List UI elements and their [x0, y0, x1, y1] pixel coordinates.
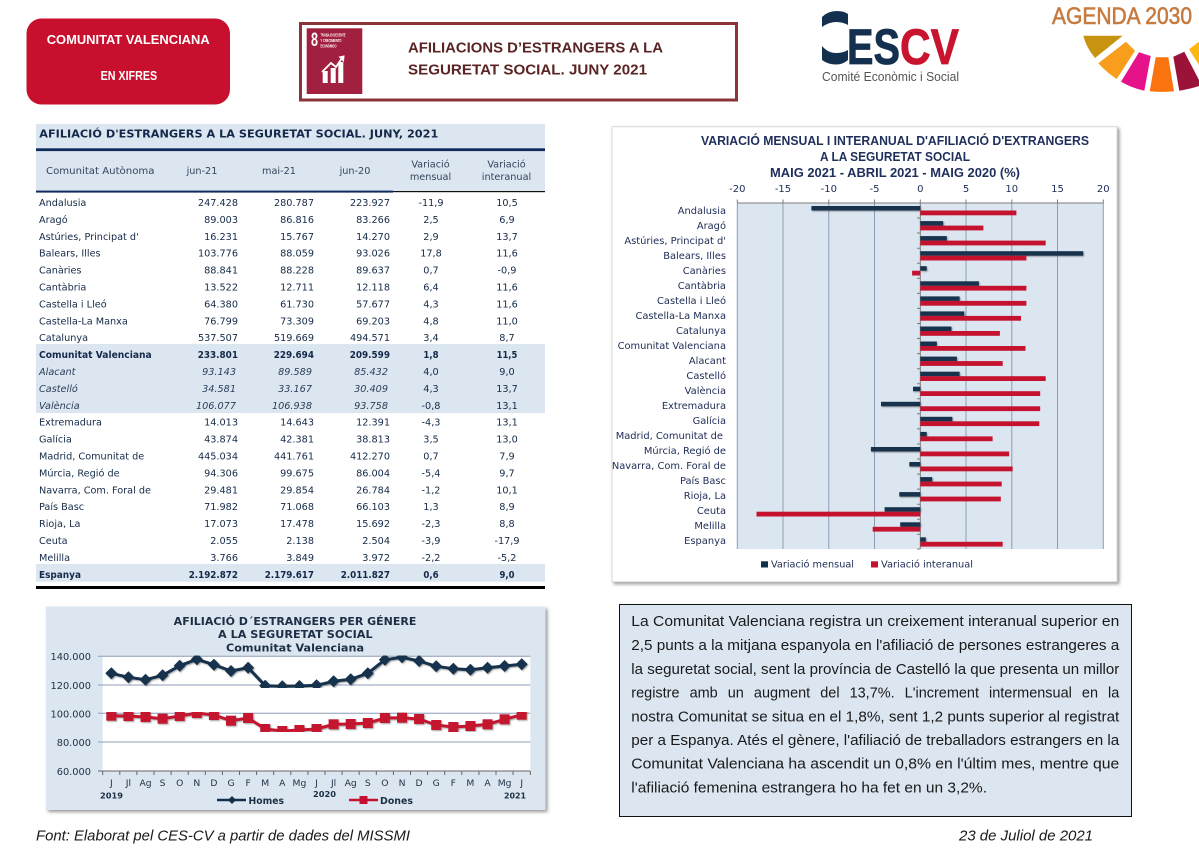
category labels: País Basc — [680, 475, 726, 487]
row: Ceuta: 2.138 — [286, 536, 314, 547]
row: Astúries: 2,9 — [423, 232, 439, 243]
month labels: Jl — [330, 778, 336, 789]
row: Aragó: 86.816 — [280, 215, 314, 226]
month labels: S — [365, 778, 371, 789]
row: Madrid: Madrid, Comunitat de — [39, 452, 144, 462]
row: Castelló: 30.409 — [354, 384, 388, 395]
row: Castella-La Manxa — [39, 316, 518, 327]
category labels: Espanya — [684, 536, 726, 547]
title box — [300, 24, 736, 100]
row: Navarra — [39, 485, 518, 496]
row: Aragó — [39, 214, 515, 226]
row: València: València — [39, 400, 80, 412]
row: Comunitat Valenciana: Comunitat Valenciana — [39, 350, 152, 361]
table header: interanual — [482, 172, 531, 183]
row: Castelló: 4,3 — [423, 384, 439, 395]
row: Espanya total: Espanya — [39, 570, 81, 581]
row: Canàries — [39, 265, 516, 277]
top axis labels: -15 — [775, 184, 791, 195]
category labels: Cantàbria — [678, 280, 726, 292]
chart title: A LA SEGURETAT SOCIAL — [820, 150, 970, 164]
row: Rioja — [39, 519, 515, 530]
month labels: O — [381, 778, 389, 789]
row: Castella-La Manxa: 73.309 — [280, 316, 314, 327]
month labels: Ag — [345, 778, 357, 789]
row: Madrid: 441.761 — [274, 452, 314, 462]
row: Galícia: 43.874 — [204, 435, 238, 446]
row: Ceuta: -3,9 — [422, 536, 440, 547]
row: Castella i Lleó: 64.380 — [204, 299, 238, 310]
line: Homes — [111, 657, 522, 686]
month labels: A — [279, 778, 286, 789]
table title: AFILIACIÓ D'ESTRANGERS A LA SEGURETAT SOCIAL. JUNY, 2021 — [39, 127, 438, 140]
line chart legend — [217, 796, 413, 807]
line chart title — [174, 615, 416, 655]
row: Catalunya — [39, 333, 515, 344]
line: Dones — [111, 713, 522, 731]
line chart legend: Dones — [380, 796, 413, 807]
row: Melilla: 3.766 — [210, 553, 238, 564]
row: Extremadura: 13,1 — [496, 418, 518, 429]
row: Madrid — [39, 452, 515, 462]
row: Múrcia — [39, 467, 515, 479]
y axis labels: 100.000 — [50, 710, 91, 720]
table header: jun-21 — [186, 166, 217, 177]
badge: Comunitat Valenciana en xifres: COMUNITAT VALENCIANA — [47, 32, 210, 47]
text block: summary — [620, 604, 1132, 816]
category labels: Melilla — [694, 521, 726, 532]
row: Castella-La Manxa: 69.203 — [356, 316, 390, 327]
row: Extremadura: -4,3 — [422, 418, 440, 429]
row: Cantàbria: 12.118 — [356, 282, 390, 294]
row: País Basc: 71.982 — [204, 502, 238, 513]
row: Balears: 88.059 — [280, 249, 314, 260]
row: Aragó: 83.266 — [356, 215, 390, 226]
row: País Basc: 8,9 — [499, 502, 515, 513]
row: Canàries: Canàries — [39, 265, 81, 277]
table header: Variació — [487, 158, 526, 170]
table header: mensual — [410, 172, 451, 183]
row: Navarra: -1,2 — [422, 485, 440, 496]
logo: Agenda 2030 — [1052, 3, 1199, 92]
row: Andalusia — [39, 198, 518, 209]
category labels: Galícia — [693, 415, 726, 427]
row: Castelló — [39, 383, 518, 395]
row: Rioja: -2,3 — [422, 519, 440, 530]
row: Cantàbria: 12.711 — [280, 282, 314, 294]
badge: Comunitat Valenciana en xifres: EN XIFRES — [101, 68, 157, 83]
row: Galícia — [39, 434, 518, 446]
row: Ceuta: 2.504 — [362, 536, 390, 547]
y axis labels: 60.000 — [57, 767, 91, 778]
category labels: Comunitat Valenciana — [618, 341, 726, 352]
row: Galícia: 42.381 — [280, 435, 314, 446]
month labels: F — [451, 778, 456, 789]
row: Andalusia: 280.787 — [274, 198, 314, 209]
row: Ceuta: 2.055 — [210, 536, 238, 547]
row: Extremadura: 12.391 — [356, 418, 390, 429]
row: Melilla: 3.972 — [362, 553, 390, 564]
month labels: G — [227, 778, 235, 789]
row: València: 93.758 — [354, 401, 388, 412]
row: Cantàbria: Cantàbria — [39, 282, 86, 294]
logo: CES CV: ES — [847, 19, 900, 75]
top axis labels: 20 — [1097, 184, 1110, 195]
row: Rioja: 17.073 — [204, 519, 238, 530]
icon: SDG 8 decent work: Y CRECIMIENTO — [320, 38, 342, 43]
row: Aragó: 6,9 — [499, 215, 515, 226]
legend: Variació interanual — [881, 558, 973, 570]
icon: SDG 8 decent work: TRABAJO DECENTE — [320, 32, 346, 38]
month labels: J — [314, 778, 318, 789]
logo: CES CV: CV — [900, 19, 960, 75]
row: País Basc: 1,3 — [423, 502, 439, 513]
row: Aragó: Aragó — [39, 214, 68, 226]
y axis labels: 140.000 — [50, 652, 91, 663]
row: Canàries: 0,7 — [423, 266, 439, 277]
text block: summary: 2,5 punts a la mitjana espanyola en l'afiliació de persones estrangeres a — [631, 638, 1119, 654]
row: Castella-La Manxa: 4,8 — [423, 316, 439, 327]
row: Alacant: 93.143 — [202, 367, 236, 378]
row: Galícia: 3,5 — [423, 435, 439, 446]
row: València — [39, 400, 518, 412]
chart title: MAIG 2021 - ABRIL 2021 - MAIG 2020 (%) — [770, 166, 1020, 180]
text block: summary: l'afiliació femenina estrangera ho ha fet en un 3,2%. — [631, 780, 987, 796]
row: Castelló: 13,7 — [496, 384, 518, 395]
month labels: A — [484, 778, 491, 789]
row: Castella i Lleó: Castella i Lleó — [39, 298, 107, 310]
badge: Comunitat Valenciana en xifres — [26, 18, 230, 104]
chart title: VARIACIÓ MENSUAL I INTERANUAL D'AFILIACIÓ D'EXTRANGERS — [701, 133, 1089, 148]
row: Canàries: -0,9 — [498, 266, 516, 277]
category labels: Rioja, La — [684, 491, 726, 502]
row: Melilla: -5,2 — [498, 553, 516, 564]
row: Melilla: Melilla — [39, 553, 70, 564]
bars: monthly variation — [811, 206, 1083, 542]
row: Madrid: 0,7 — [423, 452, 439, 462]
row: Extremadura — [39, 418, 518, 429]
row: Espanya total — [36, 564, 545, 582]
row: Canàries: 89.637 — [356, 266, 390, 277]
top axis labels: 15 — [1051, 184, 1064, 195]
row: Alacant — [38, 367, 515, 378]
row: Astúries: 16.231 — [204, 232, 238, 243]
row: País Basc: 71.068 — [280, 502, 314, 513]
icon: SDG 8 decent work: 8 — [311, 30, 318, 51]
row: Balears: 11,6 — [496, 249, 518, 260]
line chart legend: Homes — [248, 796, 284, 807]
row: Madrid: 445.034 — [198, 452, 238, 462]
row: País Basc: 66.103 — [356, 502, 390, 513]
row: Alacant: 4,0 — [423, 367, 439, 378]
highlighted block: Comunitat Valenciana — [36, 344, 545, 413]
icon: SDG 8 decent work — [307, 28, 362, 94]
row: Andalusia: -11,9 — [418, 198, 444, 209]
row: Cantàbria: 6,4 — [423, 282, 439, 294]
row: Espanya total: 2.011.827 — [341, 570, 390, 581]
plot background and grid — [737, 200, 1103, 549]
row: Cantàbria: 11,6 — [496, 282, 518, 294]
text block: summary: Comunitat Valenciana ha ascendit un 0,8% en l'últim mes, mentre que — [631, 757, 1119, 773]
category labels: Alacant — [689, 356, 726, 367]
category labels: Madrid, Comunitat de — [616, 431, 723, 442]
month labels: N — [193, 778, 200, 789]
row: Alacant: Alacant — [38, 367, 77, 378]
row: Rioja: 8,8 — [499, 519, 515, 530]
chart title — [701, 133, 1089, 180]
row: València: 106.077 — [196, 401, 237, 412]
title box: AFILIACIONS D’ESTRANGERS A LA — [408, 41, 664, 57]
row: València: -0,8 — [422, 401, 440, 412]
row: Comunitat Valenciana: 209.599 — [350, 350, 390, 361]
month labels: D — [416, 778, 423, 789]
logo: CES CV: Comité Econòmic i Social — [822, 70, 959, 84]
title box: SEGURETAT SOCIAL. JUNY 2021 — [408, 63, 647, 79]
table header: Comunitat Autònoma — [46, 165, 155, 177]
source note: Font: Elaborat pel CES-CV a partir de dades del MISSMI — [36, 828, 410, 844]
y axis labels: 80.000 — [57, 738, 91, 749]
top axis labels — [729, 184, 1110, 195]
row: Ceuta: Ceuta — [39, 536, 68, 547]
category labels: Canàries — [683, 265, 726, 277]
category labels: Múrcia, Regió de — [644, 445, 726, 457]
row: Extremadura: 14.643 — [280, 418, 314, 429]
row: Castella i Lleó: 57.677 — [356, 299, 390, 310]
row: Balears — [39, 249, 518, 260]
row: Castella i Lleó: 61.730 — [280, 299, 314, 310]
category labels: Balears, Illes — [663, 251, 726, 262]
row: Navarra: 29.854 — [280, 485, 314, 496]
logo: CES CV — [822, 11, 960, 84]
row: Espanya total: 2.192.872 — [189, 570, 238, 581]
month labels: J — [109, 778, 113, 789]
row: Alacant: 89.589 — [278, 367, 312, 378]
table header: Variació — [411, 158, 450, 170]
category labels: Catalunya — [676, 326, 726, 337]
date: 23 de Juliol de 2021 — [958, 828, 1093, 844]
row: País Basc — [39, 501, 515, 513]
row: Catalunya: 3,4 — [423, 333, 439, 344]
row: Rioja: 15.692 — [356, 519, 390, 530]
row: Aragó: 2,5 — [423, 215, 439, 226]
row: País Basc: País Basc — [39, 501, 84, 513]
year labels — [100, 790, 526, 800]
row: Comunitat Valenciana: 233.801 — [198, 350, 238, 361]
category labels: Castella-La Manxa — [635, 311, 726, 322]
month labels: Mg — [293, 778, 306, 789]
row: Extremadura: Extremadura — [39, 418, 102, 429]
category labels: Aragó — [697, 220, 726, 232]
row: Andalusia: 223.927 — [350, 198, 390, 209]
row: Rioja: 17.478 — [280, 519, 314, 530]
row: Balears: 17,8 — [420, 249, 442, 260]
top axis labels: -20 — [729, 184, 745, 195]
row: Astúries: 14.270 — [356, 232, 390, 243]
row: Múrcia: -5,4 — [422, 468, 440, 479]
text block: summary: la seguretat social, sent la província de Castelló la que presenta un millor — [631, 662, 1120, 678]
category labels: Astúries, Principat d' — [624, 235, 726, 247]
row: Extremadura: 14.013 — [204, 418, 238, 429]
icon: SDG 8 decent work: ECONÓMICO — [320, 44, 337, 48]
row: València: 13,1 — [496, 401, 518, 412]
row: Castella-La Manxa: 76.799 — [204, 316, 238, 327]
month labels: Jl — [125, 778, 131, 789]
month labels: M — [466, 778, 474, 789]
row: Galícia: 38.813 — [356, 435, 390, 446]
row: Espanya total: 2.179.617 — [265, 570, 314, 581]
row: Castella i Lleó — [39, 298, 518, 310]
row: Múrcia: 94.306 — [204, 468, 238, 479]
row: Andalusia: 10,5 — [496, 198, 518, 209]
row: Astúries: Astúries, Principat d' — [39, 231, 139, 243]
row: Múrcia: 99.675 — [280, 468, 314, 479]
row: Astúries: 13,7 — [496, 232, 518, 243]
row: Balears: 93.026 — [356, 249, 390, 260]
table: foreign affiliates by region — [36, 124, 545, 589]
y axis labels — [50, 652, 91, 778]
row: Comunitat Valenciana — [39, 350, 517, 361]
top axis labels: 5 — [963, 184, 969, 195]
row: Alacant: 9,0 — [499, 367, 515, 378]
month labels: F — [245, 778, 251, 789]
row: Navarra: Navarra, Com. Foral de — [39, 485, 151, 496]
line chart title: AFILIACIÓ D´ESTRANGERS PER GÉNERE — [174, 615, 416, 628]
row: Múrcia: 86.004 — [356, 468, 390, 479]
category labels: Castella i Lleó — [657, 295, 726, 307]
row: Castelló: Castelló — [39, 383, 78, 395]
legend — [761, 558, 973, 570]
row: Castella-La Manxa: 11,0 — [496, 316, 518, 327]
row: Comunitat Valenciana: 1,8 — [423, 350, 439, 361]
row: Catalunya: 8,7 — [499, 333, 515, 344]
row: Castelló: 34.581 — [202, 384, 236, 395]
row: Astúries: 15.767 — [280, 232, 314, 243]
row: Comunitat Valenciana: 229.694 — [274, 350, 314, 361]
panel: monthly and yearly variation bar chart — [612, 127, 1117, 582]
row: Catalunya: 494.571 — [350, 333, 390, 344]
month labels: G — [433, 778, 440, 789]
top axis labels: -5 — [870, 184, 879, 195]
row: Catalunya: 537.507 — [198, 333, 238, 344]
top axis labels: 0 — [917, 184, 923, 195]
line chart title: A LA SEGURETAT SOCIAL — [218, 629, 373, 641]
row: Galícia: 13,0 — [496, 435, 518, 446]
row: Cantàbria: 13.522 — [204, 282, 238, 294]
month labels: J — [519, 778, 523, 789]
bars: yearly variation — [756, 210, 1046, 547]
text block: summary: La Comunitat Valenciana registra un creixement interanual superior en — [631, 614, 1119, 630]
year labels: 2021 — [504, 791, 526, 800]
row: Balears: 103.776 — [198, 249, 238, 260]
month labels: N — [399, 778, 405, 789]
category labels: Ceuta — [697, 506, 726, 517]
line chart title: Comunitat Valenciana — [226, 643, 364, 655]
category labels: Castelló — [686, 370, 726, 382]
row: Navarra: 10,1 — [496, 485, 518, 496]
row: Balears: Balears, Illes — [39, 249, 101, 260]
row: Melilla: 3.849 — [286, 553, 314, 564]
row: Castella-La Manxa: Castella-La Manxa — [39, 316, 128, 327]
row: Catalunya: 519.669 — [274, 333, 314, 344]
text block: summary: per a Espanya. Atés el gènere, l'afiliació de treballadors estrangers en la — [631, 733, 1119, 749]
legend: Variació mensual — [771, 558, 854, 570]
row: Cantàbria — [39, 282, 518, 294]
row: Madrid: 412.270 — [350, 452, 390, 462]
y axis labels: 120.000 — [50, 681, 91, 692]
year labels: 2019 — [100, 791, 123, 800]
month labels: Mg — [498, 778, 511, 789]
month labels: S — [160, 778, 166, 789]
table header — [36, 148, 545, 193]
row: Madrid: 7,9 — [499, 452, 515, 462]
text block: summary: nostra Comunitat se situa en el 1,8%, sent 1,2 punts superior al registrat — [631, 709, 1119, 725]
category labels: Extremadura — [662, 401, 726, 412]
category labels: Andalusia — [678, 206, 726, 217]
table header: mai-21 — [262, 166, 296, 177]
row: Navarra: 26.784 — [356, 485, 390, 496]
table title — [36, 124, 545, 148]
row: Aragó: 89.003 — [204, 215, 238, 226]
category labels: València — [685, 385, 726, 397]
row: Canàries: 88.841 — [204, 266, 238, 277]
month labels: M — [261, 778, 269, 789]
month labels: O — [176, 778, 183, 789]
row: Melilla: -2,2 — [422, 553, 440, 564]
row: Castelló: 33.167 — [278, 384, 313, 395]
plot area and grid — [98, 656, 530, 775]
row: Espanya total: 0,6 — [423, 570, 439, 581]
row: Navarra: 29.481 — [204, 485, 238, 496]
row: Castella i Lleó: 11,6 — [496, 299, 518, 310]
row: Melilla — [39, 553, 516, 564]
row: Múrcia: Múrcia, Regió de — [39, 467, 120, 479]
row: Alacant: 85.432 — [354, 367, 388, 378]
row: Ceuta: -17,9 — [494, 536, 520, 547]
row: Astúries — [39, 231, 518, 243]
row: Galícia: Galícia — [39, 434, 72, 446]
row: Múrcia: 9,7 — [499, 468, 515, 479]
row: Andalusia: Andalusia — [39, 198, 86, 209]
row: Andalusia: 247.428 — [198, 198, 238, 209]
row: Ceuta — [39, 536, 520, 547]
top axis labels: 10 — [1005, 184, 1018, 195]
text block: summary: registre amb un augment del 13,7%. L'increment intermensual en la — [631, 686, 1119, 702]
row: Canàries: 88.228 — [280, 266, 314, 277]
table header: jun-20 — [339, 166, 370, 177]
row: València: 106.938 — [272, 401, 312, 412]
month labels: D — [210, 778, 217, 789]
category labels — [612, 206, 726, 547]
year labels: 2020 — [313, 790, 336, 799]
row: Comunitat Valenciana: 11,5 — [497, 350, 517, 361]
row: Espanya total: 9,0 — [500, 570, 515, 581]
category labels: Navarra, Com. Foral de — [612, 461, 726, 472]
panel: gender line chart — [46, 607, 546, 810]
month labels: Ag — [139, 778, 152, 789]
row: Catalunya: Catalunya — [39, 333, 88, 344]
row: Rioja: Rioja, La — [39, 519, 81, 530]
month labels — [109, 778, 523, 789]
row: Castella i Lleó: 4,3 — [423, 299, 439, 310]
top axis labels: -10 — [821, 184, 837, 195]
